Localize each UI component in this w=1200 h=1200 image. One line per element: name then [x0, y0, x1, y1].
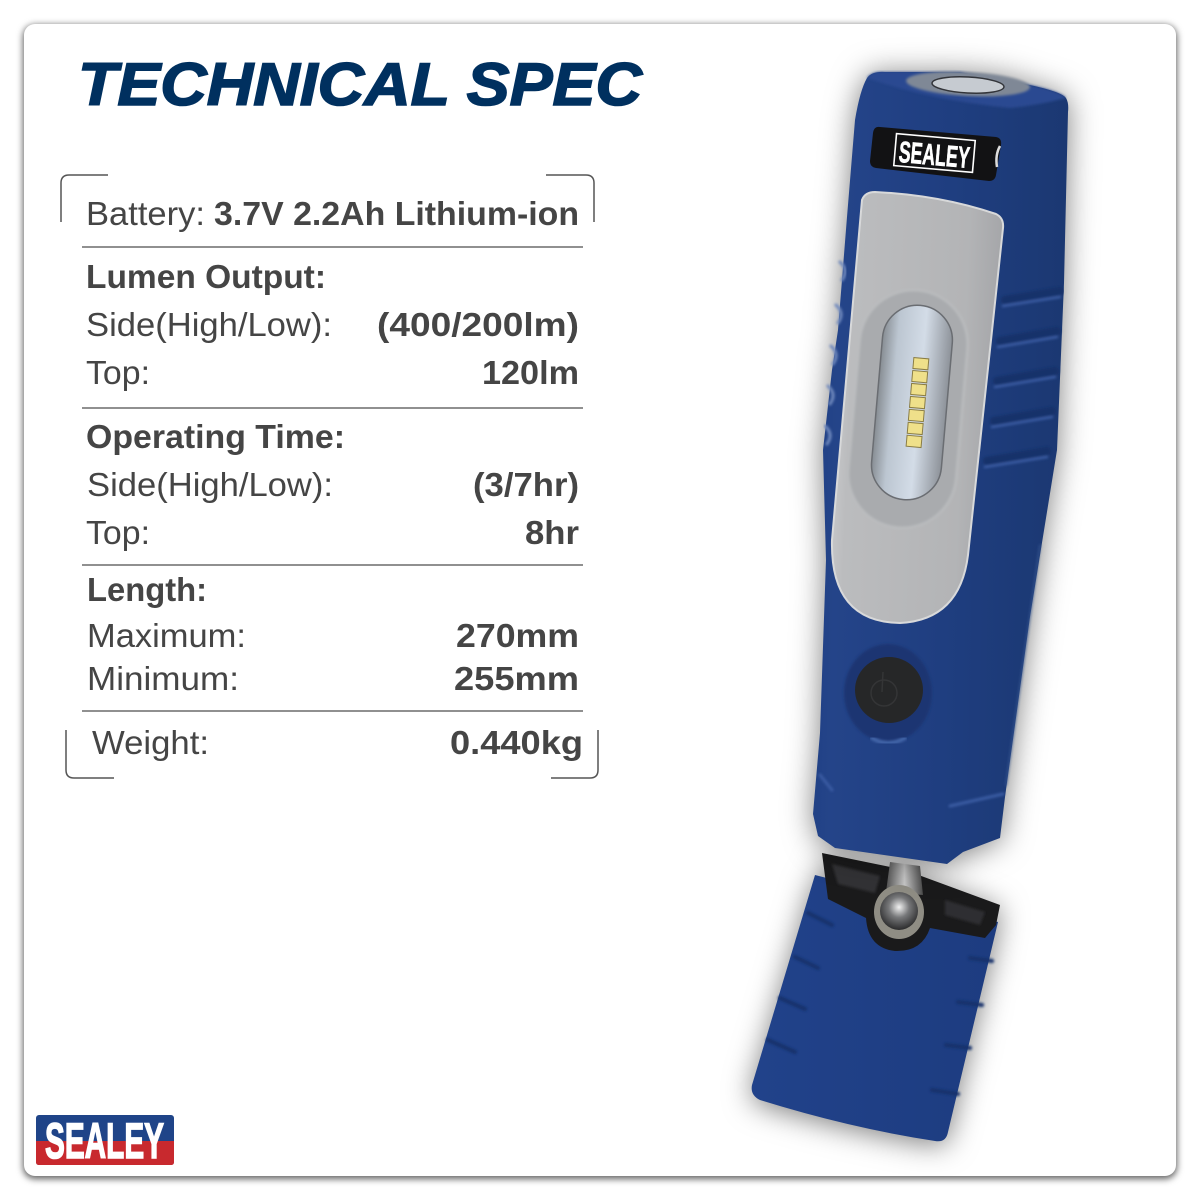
top lens [906, 69, 1031, 99]
badge: sealey logo: SEALEY [897, 136, 971, 175]
section: length: Maximum: [87, 617, 246, 654]
lamp recess [844, 286, 972, 532]
badge: black label [870, 127, 1001, 181]
logo: sealey: SEALEY [45, 1113, 164, 1169]
power button [855, 657, 923, 723]
chrome ball joint [874, 885, 924, 939]
bracket: bottom right [551, 730, 598, 778]
row: weight: Weight: [92, 724, 209, 761]
left grip bumps [825, 262, 845, 444]
section: lumen output: Lumen Output: [86, 258, 326, 295]
illustration: inspection torch [752, 69, 1068, 1141]
section: lumen output: Side(High/Low): [86, 306, 332, 343]
section: operating time: Side(High/Low): [87, 466, 333, 503]
section: lumen output: (400/200lm) [377, 306, 579, 343]
section: lumen output: Top: [86, 354, 150, 391]
section: lumen output [86, 258, 579, 391]
section: length: Minimum: [87, 660, 239, 697]
body top surface [867, 72, 1066, 108]
bracket: top right [546, 175, 594, 222]
section: operating time: (3/7hr) [473, 466, 579, 503]
led strip [906, 358, 929, 448]
section: operating time: 8hr [525, 514, 579, 551]
row: battery: Battery: [86, 195, 205, 232]
chrome stem [886, 862, 923, 895]
bracket: top left [61, 175, 108, 222]
title: TECHNICAL SPEC [78, 51, 644, 118]
base body [752, 875, 998, 1141]
row: weight: 0.440kg [450, 724, 583, 761]
clip [822, 853, 1000, 951]
torch base [752, 853, 1000, 1141]
section: lumen output: 120lm [482, 354, 579, 391]
spec table [61, 175, 598, 778]
power button surround [844, 644, 932, 742]
row: battery: 3.7V 2.2Ah Lithium-ion [214, 195, 579, 232]
section: length: Length: [87, 571, 207, 608]
lower body ribs [820, 545, 1040, 806]
section: length [87, 571, 579, 697]
row: weight [92, 724, 583, 761]
section: length: 270mm [456, 617, 579, 654]
silver lamp panel [832, 192, 1003, 623]
bracket: bottom left [66, 730, 114, 778]
section: operating time [86, 418, 579, 551]
torch body [813, 69, 1068, 864]
right grip ribs [985, 291, 1060, 467]
base grip ribs [768, 913, 992, 1094]
section: operating time: Operating Time: [86, 418, 345, 455]
section: operating time: Top: [86, 514, 150, 551]
logo: sealey [36, 1113, 174, 1169]
lamp lens [869, 302, 955, 503]
section: length: 255mm [454, 660, 579, 697]
